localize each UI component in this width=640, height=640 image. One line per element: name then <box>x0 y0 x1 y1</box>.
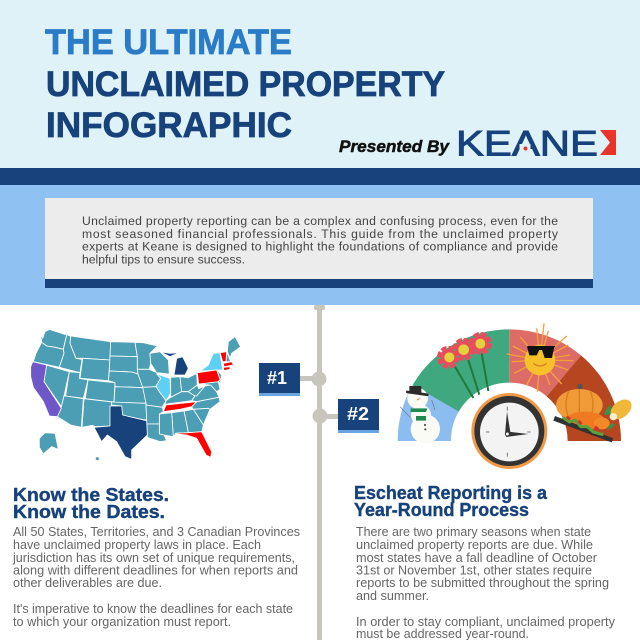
state: Illinois <box>156 374 171 401</box>
body text: unclaimed property reports are due. While <box>356 537 593 552</box>
title: INFOGRAPHIC <box>46 105 292 145</box>
body text: along with different deadlines for when reports and <box>13 562 298 578</box>
intro panel <box>0 185 640 305</box>
state: Florida <box>175 432 212 457</box>
title <box>45 22 445 145</box>
state: California <box>31 362 61 417</box>
timeline line <box>314 305 325 640</box>
heading <box>354 482 548 520</box>
badge #2: #2 <box>347 404 369 424</box>
heading: Escheat Reporting is a <box>354 482 548 503</box>
navy band <box>0 168 640 185</box>
intro text: experts at Keane is designed to highlight the foundations of compliance and provide <box>82 240 558 254</box>
body text: and summer. <box>356 588 429 603</box>
badge #2 <box>338 399 379 433</box>
body text: most states have a fall deadline of October <box>356 550 598 565</box>
state: Texas <box>94 406 147 459</box>
arc: fall <box>547 355 621 441</box>
body text: In order to stay compliant, unclaimed property <box>356 614 615 629</box>
intro text <box>82 214 559 266</box>
arc: spring <box>413 329 509 412</box>
body text: It's imperative to know the deadlines for each state <box>13 601 293 616</box>
body text: reports to be submitted throughout the spring <box>356 575 609 590</box>
intro text: Unclaimed property reporting can be a complex and confusing process, even for the <box>82 214 558 228</box>
body text: have unclaimed property laws in place. Each <box>13 537 261 552</box>
state: Pennsylvania <box>197 370 220 384</box>
icon: snowman <box>400 386 440 444</box>
heading: Know the Dates. <box>13 501 165 522</box>
state: Michigan <box>160 352 188 375</box>
body text: other deliverables are due. <box>13 575 162 590</box>
icon: flowers <box>440 335 489 398</box>
presented by: Presented By <box>339 137 451 156</box>
heading: Know the States. <box>13 484 169 505</box>
state: New York <box>200 353 223 371</box>
title: UNCLAIMED PROPERTY <box>46 64 445 104</box>
body text: jurisdiction has its own set of unique requirements, <box>12 550 295 565</box>
heading <box>13 484 169 522</box>
logo: Keane: KEANE <box>456 124 598 164</box>
body text: There are two primary seasons when state <box>356 524 591 539</box>
body text <box>356 524 615 640</box>
body text <box>12 524 300 629</box>
body text: All 50 States, Territories, and 3 Canadian Provinces <box>13 524 300 539</box>
body text: to which your organization must report. <box>13 614 231 629</box>
title: THE ULTIMATE <box>45 22 292 62</box>
heading: Year-Round Process <box>354 499 529 520</box>
section 2: Escheat Reporting <box>354 482 615 640</box>
arc: summer <box>509 329 581 396</box>
map: United States <box>31 329 241 461</box>
badge #1 <box>259 363 300 396</box>
body text: 31st or November 1st, other states require <box>356 562 592 578</box>
badge #1: #1 <box>267 368 287 388</box>
icon: turkey and pumpkin <box>553 384 635 442</box>
arc: winter <box>398 385 459 441</box>
icon: sun <box>507 323 573 392</box>
states: Vermont, Massachusetts, Connecticut <box>220 352 233 371</box>
intro text: most seasoned financial professionals. This guide from the unclaimed property <box>82 227 559 241</box>
icon: clock <box>471 393 547 469</box>
seasons dial <box>398 323 635 469</box>
section 1: Know the States <box>12 484 300 629</box>
intro text: helpful tips to ensure success. <box>82 252 245 266</box>
connector and node #2 <box>312 408 339 424</box>
header panel <box>0 0 640 168</box>
state: Tennessee <box>163 402 197 412</box>
connector and node #1 <box>299 372 326 386</box>
